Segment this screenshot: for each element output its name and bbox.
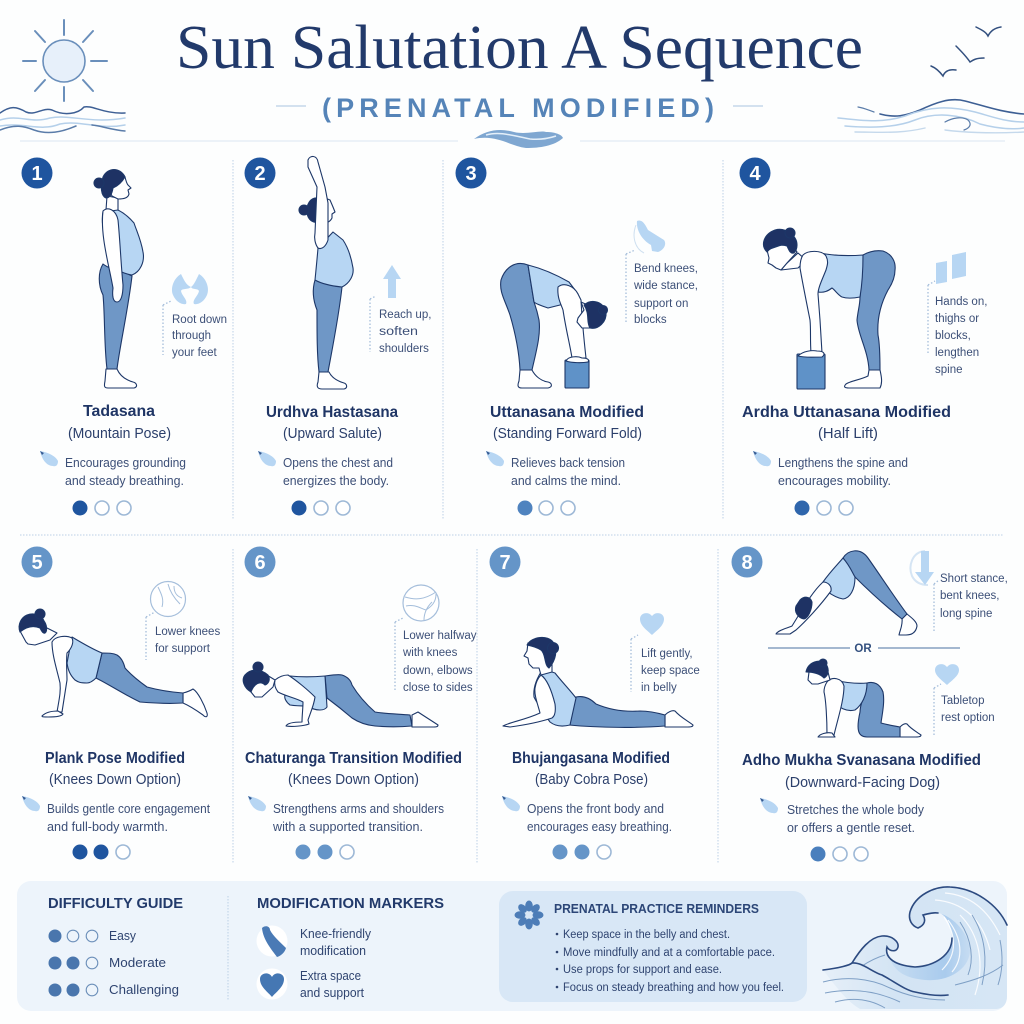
benefit text: energizes the body. — [283, 474, 389, 488]
difficulty dots — [552, 844, 611, 860]
panel: pose 6 — [243, 546, 477, 860]
panel: pose 1 — [22, 158, 227, 516]
step number 2 — [244, 158, 276, 188]
step number 7 — [490, 546, 520, 578]
callout: tabletop — [934, 664, 995, 735]
panel: pose 5 — [19, 546, 220, 860]
step number 1 — [22, 158, 52, 188]
callout: lower halfway — [395, 585, 477, 694]
reminders list — [556, 929, 784, 994]
icon: ocean wave — [823, 887, 1007, 1009]
pose name: Ardha Uttanasana Modified — [742, 404, 951, 421]
benefit text: encourages mobility. — [778, 474, 891, 488]
figure: downward-facing dog — [776, 551, 917, 635]
marker: knee-friendly — [256, 926, 372, 958]
step number 8: 8 — [741, 552, 753, 574]
legend divider — [227, 896, 229, 1000]
pose subtitle: (Mountain Pose) — [68, 426, 171, 442]
benefit text: and calms the mind. — [511, 474, 621, 488]
callout: blocks: blocks, — [935, 330, 971, 342]
benefit text: Strengthens arms and shoulders — [273, 802, 444, 816]
callout: root down: Root down — [172, 314, 227, 326]
step number 1: 1 — [31, 163, 43, 185]
pose name: Urdhva Hastasana — [266, 404, 398, 421]
callout: bend knees: support on — [634, 298, 688, 310]
callout: blocks — [928, 252, 987, 376]
step number 6: 6 — [254, 552, 266, 574]
figure: tabletop — [806, 659, 921, 737]
pose subtitle: (Knees Down Option) — [288, 772, 419, 788]
difficulty legend: Moderate — [109, 955, 166, 970]
icon: right waves — [838, 100, 1024, 133]
callout: reach up: shoulders — [379, 343, 429, 355]
reminders list: Keep space in the belly and chest. — [563, 929, 730, 941]
callout: lower knees — [146, 582, 220, 660]
callout: root down: through — [172, 330, 211, 342]
icon: leaf — [22, 796, 40, 811]
callout: reach up: Reach up, — [379, 309, 431, 321]
callout: bend knees: Bend knees, — [634, 263, 698, 275]
callout: bend knees: blocks — [634, 314, 667, 326]
pose name: Plank Pose Modified — [45, 750, 185, 767]
marker: extra space: and support — [300, 986, 365, 1000]
benefit text: Lengthens the spine and — [778, 456, 908, 470]
difficulty dots — [72, 500, 131, 516]
pose name: Chaturanga Transition Modified — [245, 750, 462, 767]
difficulty dots — [72, 844, 130, 860]
difficulty dots — [810, 846, 868, 862]
pose subtitle: (Knees Down Option) — [49, 772, 181, 788]
difficulty dots — [296, 844, 354, 860]
icon: birds — [931, 27, 1001, 76]
marker: knee-friendly: modification — [300, 944, 366, 958]
difficulty dots — [518, 500, 575, 516]
callout: lift gently: in belly — [641, 682, 677, 694]
benefit text — [511, 456, 625, 488]
modification markers heading: MODIFICATION MARKERS — [257, 895, 444, 912]
icon: leaf — [760, 798, 778, 813]
pose subtitle: (Baby Cobra Pose) — [535, 772, 648, 788]
panel: pose 8 — [732, 546, 1008, 862]
callout: blocks: lengthen — [935, 347, 979, 359]
icon: centre wave ornament — [474, 130, 563, 148]
callout: bend knees — [626, 221, 698, 326]
callout: bend knees: wide stance, — [633, 280, 698, 292]
pose name: Tadasana — [83, 403, 155, 420]
callout: short stance: Short stance, — [940, 573, 1008, 585]
figure: Tadasana — [94, 170, 143, 388]
icon: leaf — [248, 796, 266, 811]
benefit text — [787, 803, 925, 835]
header divider — [20, 140, 1005, 142]
step number 4 — [740, 158, 770, 188]
callout: blocks: thighs or — [935, 313, 979, 325]
benefit text: Opens the front body and — [527, 802, 664, 816]
icon: leaf — [40, 451, 58, 466]
benefit text: or offers a gentle reset. — [787, 821, 915, 835]
marker: extra space: Extra space — [300, 969, 361, 983]
icon: leaf — [753, 451, 771, 466]
icon: left waves — [0, 107, 125, 133]
benefit text: Relieves back tension — [511, 456, 625, 470]
step number 5: 5 — [31, 552, 43, 574]
panel: pose 7 — [490, 546, 700, 860]
difficulty legend: Easy — [109, 928, 136, 943]
pose subtitle: (Standing Forward Fold) — [493, 426, 642, 442]
pose subtitle: (Upward Salute) — [283, 426, 382, 442]
step number 5 — [22, 546, 52, 578]
reminders list: Move mindfully and at a comfortable pace. — [563, 947, 775, 959]
icon: sun — [23, 20, 107, 101]
benefit text — [283, 456, 393, 488]
difficulty dots — [292, 500, 350, 516]
icon: lotus flower — [514, 900, 544, 930]
callout: root down: your feet — [172, 347, 218, 359]
step number 8 — [732, 546, 762, 578]
or separator: OR — [854, 643, 872, 655]
pose name: Adho Mukha Svanasana Modified — [742, 752, 981, 769]
panel: pose 2 — [244, 156, 431, 516]
benefit text — [65, 456, 186, 488]
callout: lower halfway: Lower halfway — [403, 630, 477, 642]
pose name: Bhujangasana Modified — [512, 750, 670, 767]
figure: Chaturanga Transition Modified — [243, 662, 438, 727]
panel: pose 3 — [456, 158, 698, 516]
benefit text: encourages easy breathing. — [527, 820, 672, 834]
reminders list: Use props for support and ease. — [563, 964, 722, 976]
benefit text: Encourages grounding — [65, 456, 186, 470]
benefit text: and full-body warmth. — [47, 820, 168, 834]
callout: blocks: spine — [935, 364, 962, 376]
benefit text — [527, 802, 672, 834]
pose subtitle: (Downward-Facing Dog) — [785, 775, 940, 791]
reminders list: Focus on steady breathing and how you feel. — [563, 982, 784, 994]
benefit text: with a supported transition. — [272, 820, 423, 834]
callout: tabletop: rest option — [941, 712, 995, 724]
callout: lower knees: Lower knees — [155, 626, 220, 638]
step number 3 — [456, 158, 486, 188]
step number 2: 2 — [254, 163, 266, 185]
pose name: Uttanasana Modified — [490, 404, 644, 421]
difficulty dots — [794, 500, 853, 516]
panel: pose 4 — [740, 158, 987, 516]
subtitle side dashes — [276, 105, 763, 107]
difficulty legend — [48, 928, 179, 997]
subtitle: (PRENATAL MODIFIED) — [322, 93, 714, 123]
figure: Urdhva Hastasana — [299, 156, 353, 389]
step number 6 — [244, 546, 276, 578]
marker: extra space — [256, 968, 365, 1000]
figure: Uttanasana Modified — [501, 263, 608, 388]
callout: reach up: soften — [379, 326, 418, 338]
step number 3: 3 — [465, 163, 477, 185]
callout: lift gently: Lift gently, — [641, 648, 693, 660]
panel: footer legend — [17, 881, 1007, 1011]
callout: root down — [163, 274, 227, 359]
figure: Ardha Uttanasana Modified — [764, 228, 895, 389]
difficulty legend: Challenging — [109, 982, 179, 997]
callout: lower halfway: down, elbows — [403, 665, 473, 677]
benefit text: Stretches the whole body — [787, 803, 925, 817]
callout: lift gently: keep space — [641, 665, 700, 677]
benefit text: and steady breathing. — [65, 474, 184, 488]
title: Sun Salutation A Sequence — [176, 14, 863, 82]
callout: reach up — [370, 265, 431, 355]
benefit text — [272, 802, 444, 834]
step number 4: 4 — [749, 163, 761, 185]
reminders box — [499, 891, 807, 1002]
benefit text: Builds gentle core engagement — [47, 802, 210, 816]
callout: blocks: Hands on, — [935, 296, 987, 308]
panel dividers — [20, 160, 1003, 863]
callout: short stance: long spine — [940, 608, 992, 620]
figure: Bhujangasana Modified — [503, 637, 693, 727]
marker: knee-friendly: Knee-friendly — [300, 927, 372, 941]
reminders heading: PRENATAL PRACTICE REMINDERS — [554, 901, 759, 916]
difficulty guide heading: DIFFICULTY GUIDE — [48, 895, 183, 912]
callout: short stance — [911, 551, 1008, 631]
benefit text — [47, 802, 210, 834]
icon: leaf — [258, 451, 276, 466]
callout: lower halfway: with knees — [402, 647, 458, 659]
pose subtitle: (Half Lift) — [818, 426, 878, 442]
benefit text: Opens the chest and — [283, 456, 393, 470]
icon: leaf — [486, 451, 504, 466]
callout: tabletop: Tabletop — [941, 695, 984, 707]
benefit text — [778, 456, 908, 488]
callout: lower knees: for support — [155, 643, 211, 655]
icon: leaf — [502, 796, 520, 811]
figure: Plank Pose Modified — [19, 609, 207, 717]
callout: short stance: bent knees, — [940, 590, 999, 602]
callout: lift gently — [631, 613, 700, 694]
callout: lower halfway: close to sides — [403, 682, 473, 694]
step number 7: 7 — [499, 552, 511, 574]
